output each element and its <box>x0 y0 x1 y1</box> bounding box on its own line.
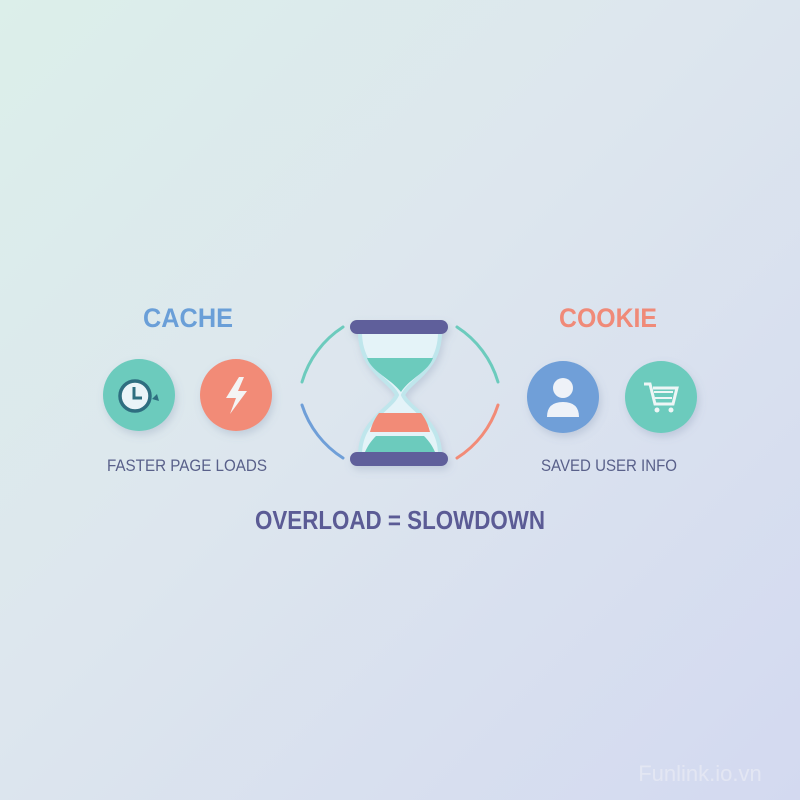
headline: OVERLOAD = SLOWDOWN <box>255 505 545 535</box>
text: saved user info: SAVED USER INFO <box>541 456 677 475</box>
hourglass <box>350 320 448 466</box>
text: faster page loads: FASTER PAGE LOADS <box>107 456 267 475</box>
icon: user <box>527 361 599 433</box>
icon: clock <box>103 359 175 431</box>
arcs around hourglass <box>302 327 498 458</box>
title: cache: CACHE <box>143 303 233 333</box>
icon: cart <box>625 361 697 433</box>
title: cookie: COOKIE <box>559 303 657 333</box>
watermark: Funlink.io.vn <box>638 761 762 786</box>
icon: lightning <box>200 359 272 431</box>
